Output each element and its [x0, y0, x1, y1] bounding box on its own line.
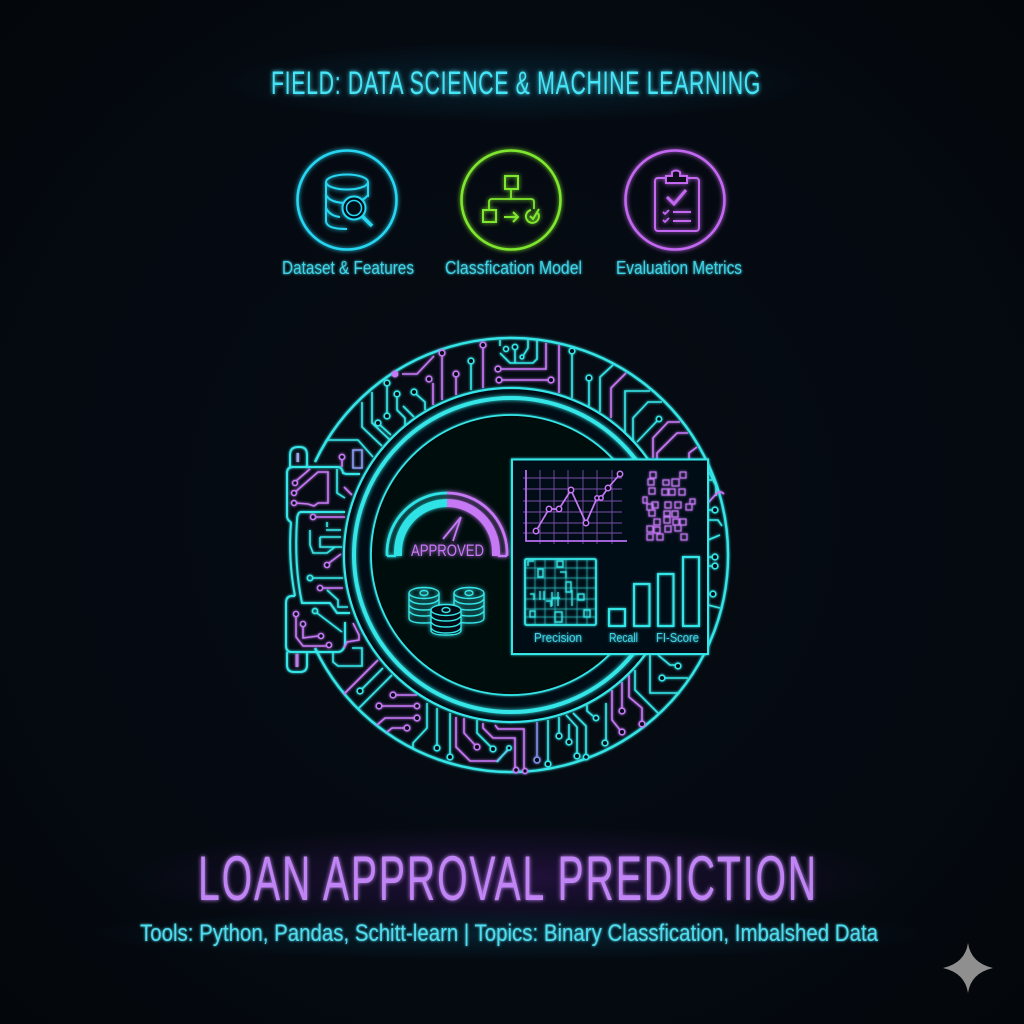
- subtitle: Tools: Python, Pandas, Schitt-learn | Topics: Binary Classfication, Imbalshed Data: [140, 920, 879, 947]
- label: dataset & features: Dataset & Features: [282, 257, 414, 278]
- circuit traces: top right: [495, 340, 697, 460]
- title: FIELD: DATA SCIENCE & MACHINE LEARNING: [271, 65, 761, 101]
- circuit traces: top left: [362, 342, 486, 446]
- main rings: [344, 388, 678, 722]
- module: upper left housing: [287, 440, 373, 613]
- panel: top icons row: [282, 150, 742, 278]
- purple scatter matrix: [643, 472, 695, 540]
- bar chart: [609, 557, 699, 626]
- label: evaluation metrics: Evaluation Metrics: [616, 257, 742, 278]
- panel: central circuit dial: [286, 338, 728, 773]
- gauge: approved: [387, 493, 507, 560]
- metric labels: Precision: [534, 631, 582, 645]
- right stack: [454, 588, 484, 623]
- icon: dataset database with magnifier: [298, 150, 396, 250]
- circuit traces: right side: [708, 470, 724, 608]
- outer ring: [315, 338, 728, 772]
- metric labels: [534, 631, 699, 645]
- cyan confusion matrix grid: [525, 559, 596, 625]
- front stack: [431, 604, 461, 635]
- circuit traces: bottom left: [344, 660, 511, 762]
- icon: coin stacks: [409, 588, 484, 635]
- icon: classification model flow: [462, 150, 560, 250]
- left stack: [409, 588, 439, 623]
- icon: evaluation clipboard: [626, 150, 724, 250]
- module: lower left housing: [286, 596, 362, 672]
- line chart: [523, 470, 627, 544]
- label: classification model: Classfication Model: [445, 257, 582, 278]
- icon: sparkle watermark: [943, 943, 993, 993]
- panel: metrics dashboard: [512, 460, 708, 654]
- circuit traces: bottom right: [483, 655, 688, 773]
- gauge label: APPROVED: [411, 542, 484, 560]
- left circuit modules: [286, 440, 373, 672]
- metric labels: FI-Score: [656, 631, 699, 645]
- metric labels: Recall: [609, 631, 638, 645]
